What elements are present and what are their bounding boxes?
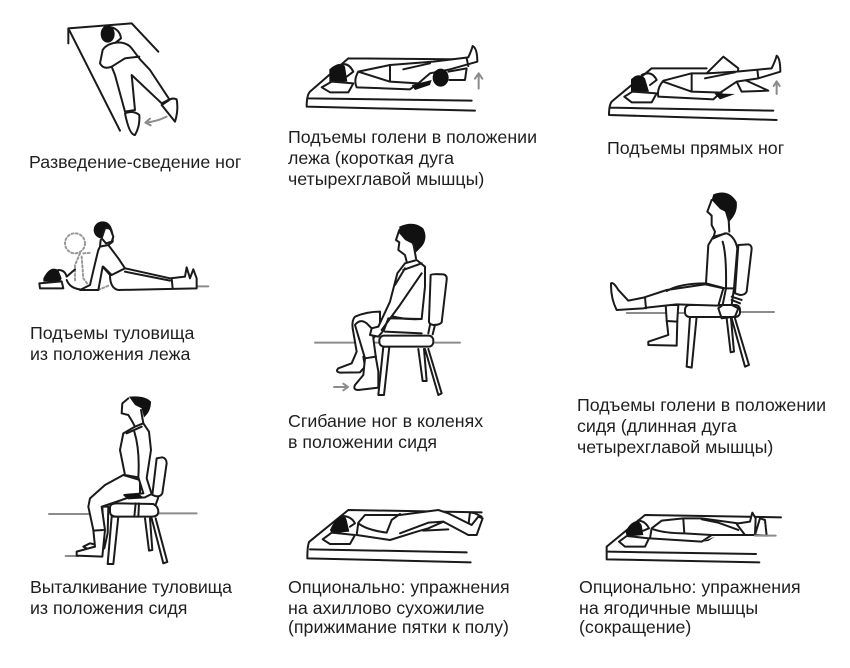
caption: Подъемы туловища — [30, 323, 195, 343]
caption: на ахиллово сухожилие — [288, 598, 485, 618]
figure: seated, foot sliding back — [315, 224, 460, 395]
caption: из положения лежа — [30, 344, 190, 364]
panel: achilles optional — [288, 510, 510, 637]
caption: лежа (короткая дуга — [288, 148, 454, 168]
icon: arrow inward — [145, 117, 167, 125]
panel: straight leg raise — [607, 56, 784, 158]
figure: sitting up from lying — [39, 221, 208, 290]
caption: Опционально: упражнения — [288, 577, 510, 597]
figure: lying with roll under knee — [307, 46, 482, 111]
caption: сидя (длинная дуга — [577, 416, 737, 436]
panel: seated knee flexion — [288, 224, 483, 452]
caption: на ягодичные мышцы — [579, 598, 758, 618]
figure: seated, arms pushing — [49, 396, 197, 564]
icon: up arrow — [774, 81, 780, 94]
figure: lying with one leg raised — [609, 56, 780, 120]
caption: Подъемы голени в положении — [288, 127, 537, 147]
caption: (прижимание пятки к полу) — [288, 617, 509, 637]
caption: Опционально: упражнения — [579, 577, 801, 597]
panel: seated push-up — [30, 396, 232, 618]
caption: Сгибание ног в коленях — [288, 411, 483, 431]
figure: lying flat — [607, 513, 781, 562]
caption: из положения сидя — [30, 598, 187, 618]
caption: Выталкивание туловища — [30, 577, 232, 597]
caption: четырехглавой мышцы) — [288, 169, 484, 189]
caption: Разведение-сведение ног — [29, 152, 241, 172]
caption: Подъемы голени в положении — [577, 395, 826, 415]
icon: right arrow — [334, 384, 348, 390]
panel: short arc quad — [288, 46, 537, 189]
figure: seated with leg extended — [611, 192, 774, 368]
panel: glutes optional — [579, 513, 801, 637]
panel: hip abduction-adduction — [29, 23, 241, 172]
caption: четырехглавой мышцы) — [577, 437, 773, 457]
caption: в положении сидя — [288, 432, 437, 452]
panel: long arc quad — [577, 192, 826, 457]
caption: Подъемы прямых ног — [607, 138, 784, 158]
figure: lying on bed, legs apart — [68, 23, 177, 135]
panel: trunk raise from lying — [30, 221, 208, 364]
caption: (сокращение) — [579, 617, 691, 637]
icon: up arrow — [475, 73, 482, 89]
figure: lying with legs bent slightly — [307, 510, 483, 562]
